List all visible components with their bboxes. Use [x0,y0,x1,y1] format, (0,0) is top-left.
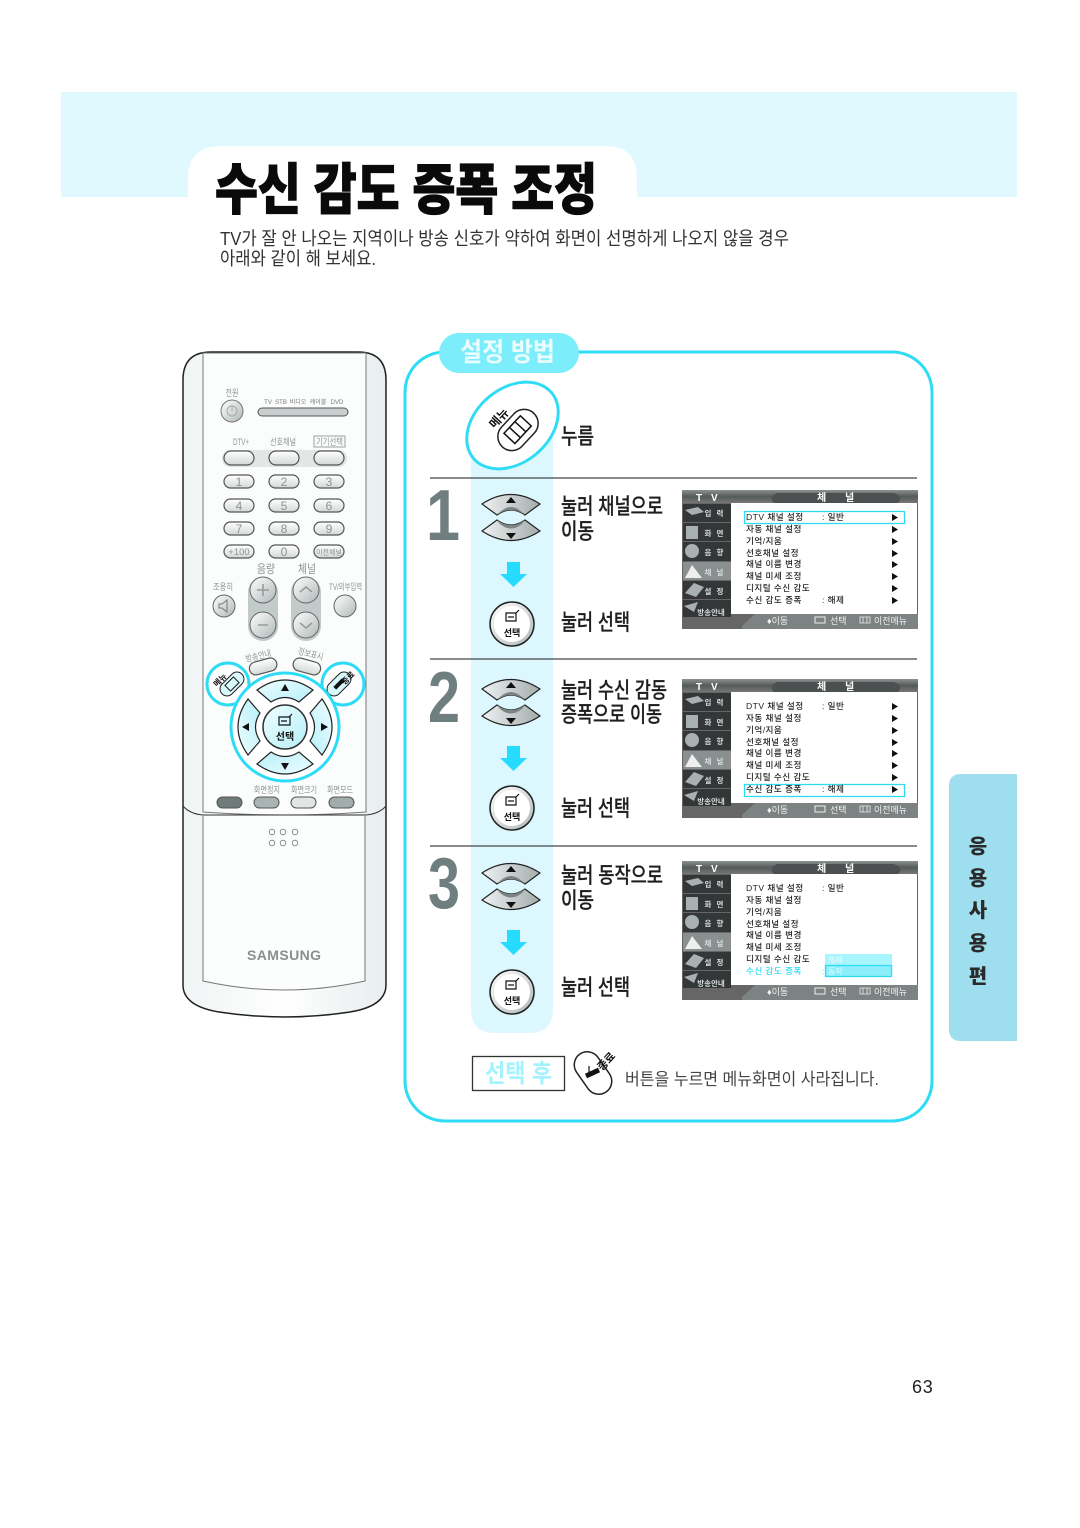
step 2 on-screen menu: 음 향 [705,736,724,746]
press instruction: 누름 [561,424,594,449]
light column behind buttons [471,435,553,1033]
step 3 on-screen menu: 채널 이름 변경 [746,929,802,940]
step 1 on-screen menu: DTV 채널 설정 [746,511,804,522]
side tab: 응 [969,835,987,858]
step 3 on-screen menu: 화 면 [705,899,724,909]
volume and channel controls: 체널 [298,562,316,576]
device selection buttons: 선호채널 [270,437,296,447]
after-selection label: 선택 후 [485,1060,552,1088]
step 1 select button [490,602,534,646]
step 1 on-screen menu: 채 널 [705,567,724,577]
step 2 on-screen menu: DTV 채널 설정 [746,700,804,711]
step 1 on-screen menu: : 해제 [822,594,844,605]
step 2 on-screen menu: ♦이동 [767,805,788,815]
step 2 on-screen menu: 널 [845,680,854,693]
number keypad: 4 [236,499,243,513]
step 1 instructions: 눌러 채널으로 [561,494,663,519]
step 1 on-screen menu: 화 면 [705,528,724,538]
step 1 on-screen menu: 디지털 수신 감도 [746,582,810,593]
number keypad: 0 [281,545,288,559]
closing note: 버튼을 누르면 메뉴화면이 사라집니다. [625,1070,879,1089]
number keypad: +100 [228,547,250,558]
side tab: 용 [969,867,987,890]
number keypad [224,475,344,559]
panel: setup steps [405,352,932,1121]
step 1 on-screen menu: 널 [845,491,854,504]
step 3 on-screen menu: : 일반 [822,882,844,893]
device status bar: 비디오 [290,398,307,406]
screen function buttons: 화면정지 [254,785,280,795]
device status bar: TV [264,400,272,406]
step 3 arrow [500,930,527,955]
number keypad: 3 [326,475,333,489]
remote body [183,352,386,1017]
step 1 instructions: 눌러 선택 [561,610,630,635]
title: 수신 감도 증폭 조정 [215,159,597,221]
title tab [188,146,637,198]
step 3 on-screen menu: V [711,864,718,875]
number keypad: 2 [281,475,288,489]
step 2 on-screen menu: V [711,682,718,693]
number keypad: 5 [281,499,288,513]
guide and info buttons [244,646,325,676]
step 2 instructions: 눌러 수신 감동 [561,678,667,703]
brand logo: SAMSUNG [247,947,321,963]
step 2 on-screen menu: 선택 [830,805,847,815]
highlighted menu button [207,663,249,705]
side tab: 용 [969,932,987,955]
step 1 instructions: 이동 [561,519,594,544]
step 3 on-screen menu: 선호채널 설정 [746,918,799,929]
page number: 63 [912,1377,934,1397]
step 1 on-screen menu: 기억/지움 [746,535,782,546]
step 1 on-screen menu: ♦이동 [767,616,788,626]
step 1 on-screen menu: T [696,493,702,504]
power button [221,388,243,422]
step 3 on-screen menu [682,861,918,1000]
volume and channel controls: 음량 [257,562,275,576]
step 1 on-screen menu: 자동 채널 설정 [746,523,802,534]
step 2 on-screen menu: 체 [817,681,826,693]
step 3 on-screen menu: : [822,966,825,976]
device selection buttons [222,436,347,467]
icon: exit button [569,1047,618,1099]
step 1 on-screen menu: 체 [817,492,826,504]
step 1 on-screen menu: 선호채널 설정 [746,547,799,558]
step 2 on-screen menu: 채널 미세 조정 [746,759,802,770]
step 3 on-screen menu: 디지털 수신 감도 [746,953,810,964]
device status bar: STB [275,400,287,406]
step 1 on-screen menu: 선택 [830,616,847,626]
step 3 select button: 선택 [504,995,520,1006]
step 2 on-screen menu: 디지털 수신 감도 [746,771,810,782]
step 2 on-screen menu: 채 널 [705,756,724,766]
step 1 on-screen menu: : 일반 [822,511,844,522]
step 1 on-screen menu: 설 정 [705,586,724,596]
step 2 on-screen menu [682,679,918,818]
intro text [220,228,789,269]
step 2 on-screen menu: 화 면 [705,717,724,727]
step 1 on-screen menu [682,490,918,629]
step 1 on-screen menu: 채널 미세 조정 [746,570,802,581]
step 3 on-screen menu: 동작 [828,966,843,976]
step 2 on-screen menu: 선호채널 설정 [746,736,799,747]
step 2 on-screen menu: T [696,682,702,693]
highlighted exit button: 종료 [340,669,357,687]
step 2 number: 2 [428,658,460,738]
step 2 instructions: 눌러 선택 [561,796,630,821]
number keypad: 8 [281,522,288,536]
step 1 select button: 선택 [504,627,520,638]
volume and channel controls: 조용히 [213,582,233,592]
highlighted menu button: 메뉴 [211,671,229,689]
screen function buttons: 화면모드 [327,785,353,795]
navigation pad: 선택 [276,730,294,743]
step 3 number: 3 [428,844,460,924]
guide and info buttons: 방송안내 [244,648,272,664]
step 2 instructions [561,678,667,821]
step 3 on-screen menu: 수신 감도 증폭 [746,965,802,976]
side tab [949,774,1017,1041]
setup method heading: 설정 방법 [460,337,555,367]
side tab: 사 [969,899,988,922]
step 3 on-screen menu: 음 향 [705,918,724,928]
step 2 select button: 선택 [504,811,520,822]
step 1 instructions [561,494,663,635]
step 3 on-screen menu: 설 정 [705,957,724,967]
device selection buttons: 기기선택 [316,437,343,447]
setup method heading [439,333,579,373]
step 2 on-screen menu: 입 력 [705,697,724,707]
step 2 on-screen menu: 자동 채널 설정 [746,712,802,723]
step 3 on-screen menu: 채널 미세 조정 [746,941,802,952]
intro text: TV가 잘 안 나오는 지역이나 방송 신호가 약하여 화면이 선명하게 나오지 않을 경우 [220,228,789,249]
guide and info buttons: 정보표시 [297,646,325,662]
step 1 on-screen menu: 입 력 [705,508,724,518]
step 3 on-screen menu: 입 력 [705,879,724,889]
step 1 on-screen menu: 이전메뉴 [874,616,907,626]
step 3 on-screen menu: 해제 [828,955,843,965]
step 2 on-screen menu: 수신 감도 증폭 [746,783,802,794]
device status bar: 케이블 [310,398,327,406]
side tab: 편 [969,965,987,988]
panel: remote control [183,352,386,1017]
step 2 select button [490,786,534,830]
volume and channel controls [213,562,362,641]
highlighted exit button [322,663,364,705]
step 3 on-screen menu: DTV 채널 설정 [746,882,804,893]
step 2 on-screen menu: 기억/지움 [746,724,782,735]
step 3 instructions: 눌러 선택 [561,975,630,1000]
step 3 on-screen menu: 채 널 [705,938,724,948]
step 1 on-screen menu: V [711,493,718,504]
step 2 on-screen menu: 설 정 [705,775,724,785]
step 2 up and down buttons [482,680,540,726]
step 1 up and down buttons [482,494,540,540]
dividers [430,478,917,846]
icon: exit button: 종료 [595,1050,618,1073]
speaker holes [269,829,298,846]
device selection buttons: DTV+ [233,437,249,447]
number keypad: 이전채널 [316,548,342,556]
step 1 on-screen menu: 방송안내 [697,607,725,617]
step 1 number: 1 [426,476,460,556]
step 3 on-screen menu: 체 [817,863,826,875]
number keypad: 6 [326,499,333,513]
step 3 on-screen menu: 방송안내 [697,978,725,988]
step 2 on-screen menu: : 일반 [822,700,844,711]
step 2 on-screen menu: 채널 이름 변경 [746,747,802,758]
top banner [61,92,1017,197]
step 2 on-screen menu: 이전메뉴 [874,805,907,815]
step 1 arrow [500,562,527,587]
step 2 instructions: 증폭으로 이동 [561,702,662,727]
step 3 instructions: 이동 [561,888,594,913]
navigation pad [231,673,339,781]
screen function buttons [217,785,354,808]
step 3 on-screen menu: ♦이동 [767,987,788,997]
number keypad: 7 [236,522,243,536]
step 1 on-screen menu: 수신 감도 증폭 [746,594,802,605]
after-selection label [472,1056,564,1090]
step 3 instructions [561,863,663,1000]
step 3 on-screen menu: 선택 [830,987,847,997]
step 1 on-screen menu: 채널 이름 변경 [746,558,802,569]
volume and channel controls: TV/외부입력 [329,581,362,592]
step 3 on-screen menu: 기억/지움 [746,906,782,917]
device status bar [258,398,348,416]
step 2 arrow [500,746,527,771]
number keypad: 1 [236,475,243,489]
menu button oval [450,364,575,487]
step 3 up and down buttons [482,864,540,910]
step 3 instructions: 눌러 동작으로 [561,863,663,888]
menu button oval: 메뉴 [486,405,512,431]
step 3 on-screen menu: T [696,864,702,875]
power button: 전원 [226,388,238,398]
step 2 on-screen menu: 방송안내 [697,796,725,806]
number keypad: 9 [326,522,333,536]
step 3 on-screen menu: 널 [845,862,854,875]
step 3 select button [490,970,534,1014]
device status bar: DVD [331,400,344,406]
intro text: 아래와 같이 해 보세요. [220,248,376,269]
step 1 on-screen menu: 음 향 [705,547,724,557]
step 3 on-screen menu: 이전메뉴 [874,987,907,997]
screen function buttons: 화면크기 [291,785,317,795]
step 3 on-screen menu: 자동 채널 설정 [746,894,802,905]
step 2 on-screen menu: : 해제 [822,783,844,794]
